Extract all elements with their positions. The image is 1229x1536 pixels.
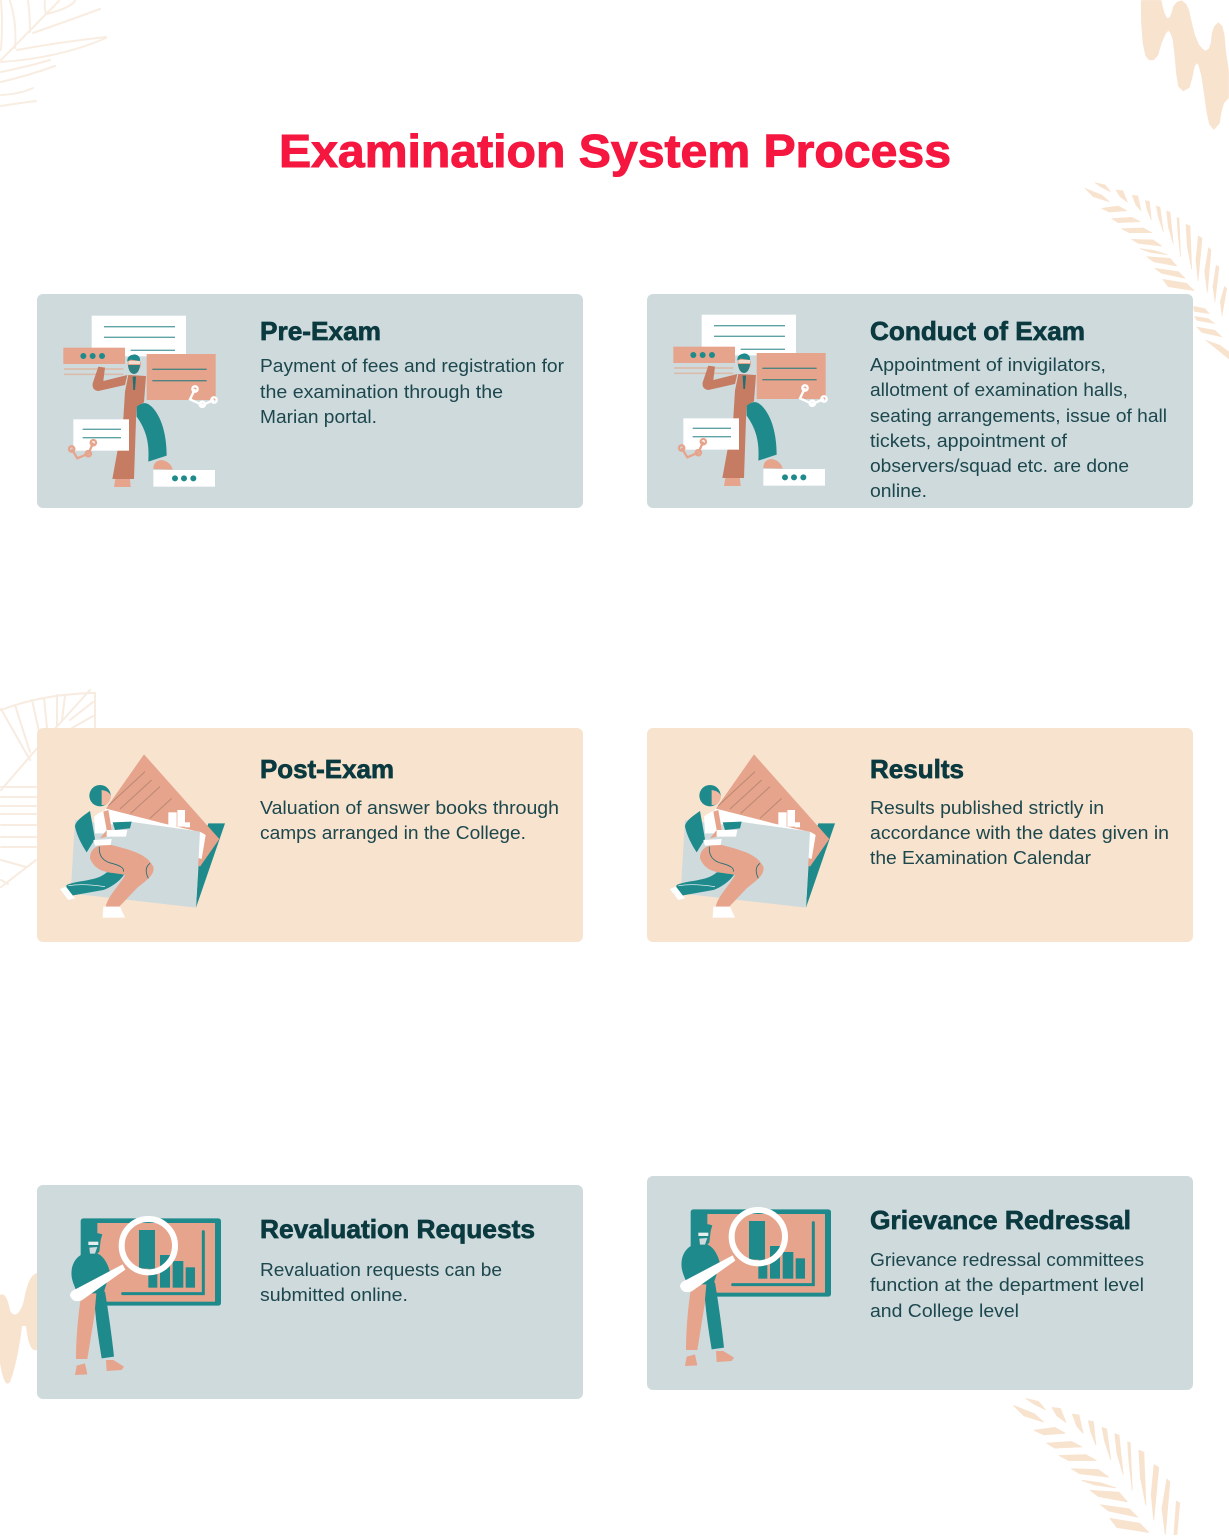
decoration: left outlined leaf [1,690,95,887]
heading: Post-Exam [260,754,394,784]
description [870,354,1167,501]
description: the Examination Calendar [870,847,1091,868]
description: the examination through the [260,381,503,402]
decoration: top-left leaf [1,1,106,106]
card background [37,1185,583,1399]
decoration: top-right wavy blob [1142,1,1228,129]
description: Revaluation requests can be [260,1259,502,1280]
description: observers/squad etc. are done [870,455,1129,476]
description: allotment of examination halls, [870,379,1128,400]
heading: Results [870,754,964,784]
title: Examination System Process [279,125,951,177]
illustration: woman with folder [60,754,225,918]
description [260,797,559,843]
card background [37,294,583,508]
panel: Revaluation Requests [37,1185,583,1399]
description: online. [870,480,927,501]
description: Marian portal. [260,406,377,427]
heading: Revaluation Requests [260,1214,535,1244]
illustration: woman with folder [670,754,835,918]
heading: Conduct of Exam [870,316,1085,346]
illustration: man with documents [673,315,827,486]
card background [37,728,583,942]
panel: Results [647,728,1193,942]
panel: Pre-Exam [37,294,583,508]
panel: Conduct of Exam [647,294,1193,508]
description: tickets, appointment of [870,430,1068,451]
illustration: person with magnifier and chart [70,1218,221,1375]
decoration: right fern [1085,183,1229,359]
heading: Pre-Exam [260,316,381,346]
description: seating arrangements, issue of hall [870,405,1167,426]
heading: Grievance Redressal [870,1205,1131,1235]
description: accordance with the dates given in [870,822,1169,843]
illustration: person with magnifier and chart [680,1209,831,1366]
description: submitted online. [260,1284,408,1305]
card background [647,294,1193,508]
description [260,355,564,427]
description: Grievance redressal committees [870,1249,1144,1270]
description [870,797,1169,868]
description [870,1249,1144,1321]
card background [647,728,1193,942]
description: Appointment of invigilators, [870,354,1106,375]
illustration: man with documents [63,316,217,487]
description: Payment of fees and registration for [260,355,564,376]
card background [647,1176,1193,1390]
description: camps arranged in the College. [260,822,526,843]
description: and College level [870,1300,1019,1321]
description [260,1259,502,1305]
panel: Post-Exam [37,728,583,942]
panel: Grievance Redressal [647,1176,1193,1390]
decoration: bottom-right fern [1014,1399,1180,1535]
decoration: left wavy blob [0,1273,37,1384]
description: Results published strictly in [870,797,1104,818]
description: function at the department level [870,1274,1144,1295]
description: Valuation of answer books through [260,797,559,818]
